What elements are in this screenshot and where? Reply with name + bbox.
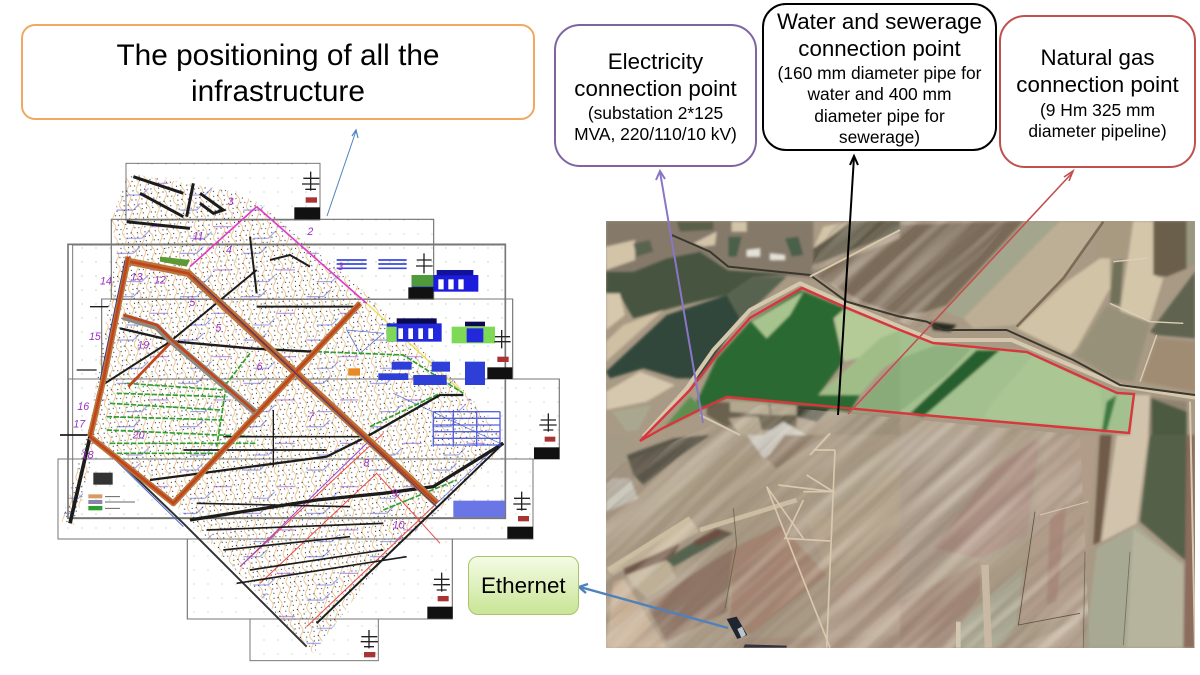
- site plan drawing: [50, 160, 570, 661]
- arrow: natural gas: [848, 171, 1073, 414]
- field tracks: [608, 450, 1130, 648]
- plot numbers: 20: [132, 429, 145, 441]
- callout: natural gas connection point: (9 Hm 325 mm: [1040, 100, 1155, 120]
- callout: water and sewerage connection point: connection point: [798, 36, 961, 61]
- title: [21, 24, 535, 120]
- plot numbers: 14: [100, 275, 112, 287]
- plot numbers: 15: [89, 331, 101, 343]
- callout: electricity connection point: (substation 2*125: [588, 103, 723, 123]
- plot numbers: 13: [131, 272, 143, 284]
- site boundary: [640, 288, 1134, 441]
- green network: [107, 352, 463, 510]
- title: infrastructure: [191, 75, 365, 108]
- sheet outlines over terrain: [58, 219, 559, 619]
- plot numbers: 6: [257, 361, 263, 373]
- callout: natural gas connection point: [999, 15, 1196, 168]
- arrow: water and sewerage: [838, 156, 858, 415]
- legend: [88, 473, 135, 510]
- callout: water and sewerage connection point: water and 400 mm: [807, 84, 952, 104]
- plot numbers: 2: [306, 226, 313, 238]
- callout: electricity connection point: [554, 24, 757, 167]
- callout: natural gas connection point: connection point: [1016, 72, 1179, 97]
- detail drawings: [337, 260, 505, 517]
- callout: electricity connection point: Electricity: [608, 49, 703, 74]
- plot numbers: 10: [393, 519, 405, 531]
- site area fill: [663, 290, 1134, 433]
- satellite image: [606, 221, 1195, 648]
- black utility lines: [60, 177, 503, 623]
- main roads: [90, 257, 437, 507]
- textured terrain area: [62, 174, 503, 654]
- callout: electricity connection point: MVA, 220/110/10 kV): [574, 124, 737, 144]
- plot numbers: 3: [337, 261, 343, 273]
- plot numbers: 19: [137, 339, 149, 351]
- farmland fields: [606, 221, 1195, 648]
- ethernet building: [727, 617, 787, 648]
- plot numbers: 16: [77, 401, 89, 413]
- title: The positioning of all the: [116, 39, 440, 72]
- plot numbers: 11: [193, 230, 204, 242]
- title blocks and north arrows: [294, 172, 559, 657]
- boundary lines: [97, 207, 500, 647]
- callout: natural gas connection point: Natural gas: [1040, 45, 1155, 70]
- roads and canal: [643, 222, 1195, 648]
- callout: natural gas connection point: diameter pipeline): [1028, 121, 1167, 141]
- plot numbers: [73, 196, 405, 531]
- callout: water and sewerage connection point: [762, 3, 997, 151]
- arrow: ethernet: [579, 584, 728, 628]
- plot numbers: 5: [215, 323, 221, 335]
- plot numbers: 3: [228, 196, 234, 208]
- arrow: infrastructure callout: [327, 130, 358, 216]
- plot numbers: 12: [154, 274, 166, 286]
- plot numbers: 17: [73, 419, 86, 431]
- callout: electricity connection point: connection point: [574, 76, 737, 101]
- drawing sheets: [58, 163, 559, 661]
- callout: water and sewerage connection point: diameter pipe for: [814, 106, 945, 126]
- plot numbers: 9: [392, 488, 398, 500]
- callout: water and sewerage connection point: Water and sewerage: [777, 9, 982, 34]
- callout: ethernet: [468, 556, 579, 615]
- plot numbers: 4: [226, 244, 232, 256]
- field furrow streaks: [606, 221, 1090, 648]
- arrow: electricity: [656, 171, 703, 423]
- callout: water and sewerage connection point: (160 mm diameter pipe for: [778, 63, 981, 83]
- callout: ethernet: Ethernet: [481, 573, 566, 598]
- plot numbers: 18: [82, 449, 94, 461]
- plot numbers: 8: [363, 458, 369, 470]
- plot numbers: 5: [189, 297, 195, 309]
- plot numbers: 7: [308, 411, 315, 423]
- callout: water and sewerage connection point: sewerage): [839, 127, 920, 147]
